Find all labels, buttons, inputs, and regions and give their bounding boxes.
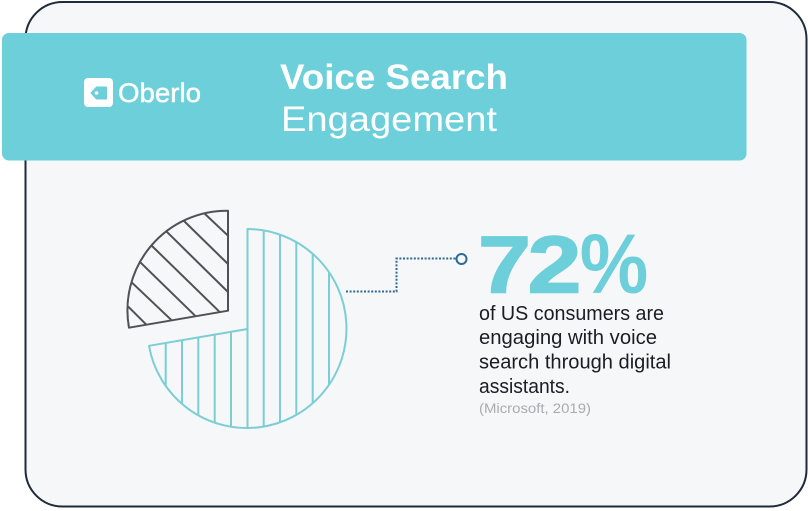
title (280, 58, 508, 139)
panel: header banner (2, 33, 746, 160)
dotted connector (346, 254, 466, 292)
pie slice: 28% dark hatched (127, 211, 228, 328)
logo wordmark: Oberlo (118, 78, 201, 108)
description text: of US consumers are (479, 303, 664, 325)
big stat: % (580, 217, 648, 311)
source: (Microsoft, 2019) (479, 401, 591, 416)
big stat: 2 (528, 220, 582, 310)
description text: engaging with voice (479, 327, 657, 349)
description text: assistants. (479, 376, 570, 398)
icon: Oberlo tag logo (84, 78, 113, 107)
big stat (478, 217, 648, 311)
pie slice: 72% teal hatched (149, 225, 346, 430)
description text: search through digital (479, 352, 671, 374)
big stat: 7 (478, 220, 531, 310)
pie chart (127, 211, 346, 430)
title: Voice Search (280, 58, 508, 97)
title: Engagement (281, 100, 497, 139)
description text (479, 303, 671, 398)
